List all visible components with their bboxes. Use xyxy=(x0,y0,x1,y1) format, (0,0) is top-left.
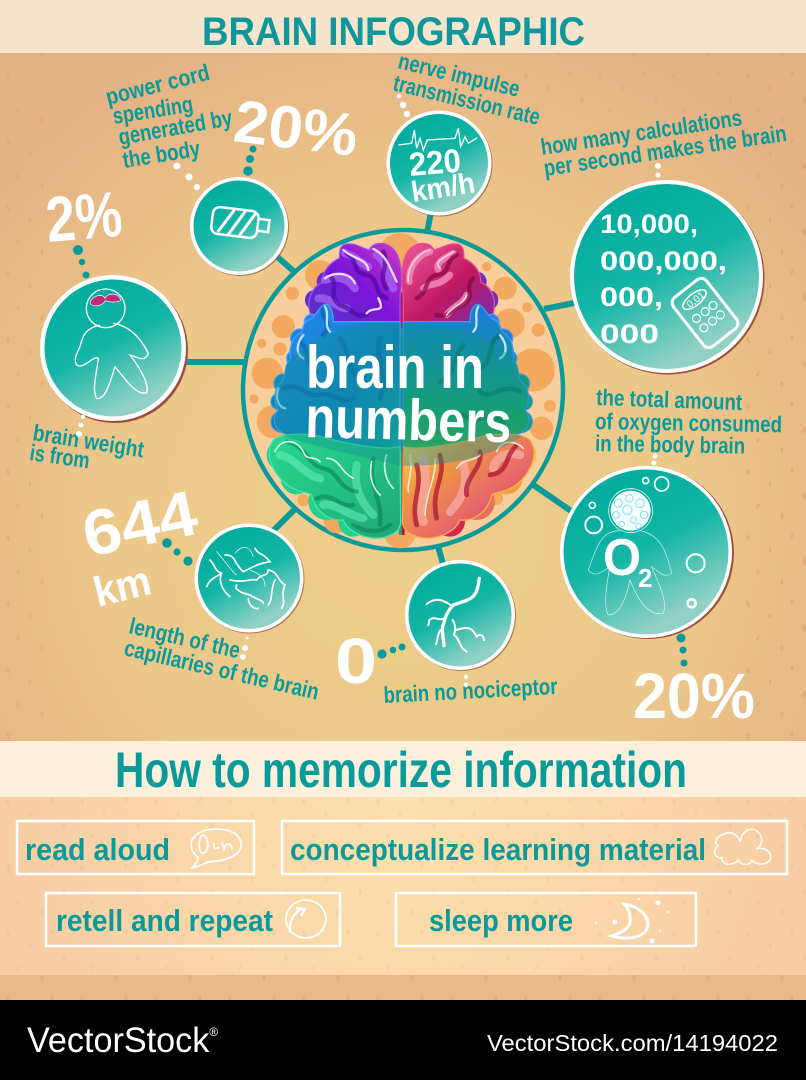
panel: capillaries xyxy=(76,476,322,705)
stat: O2: O xyxy=(603,529,641,587)
stat: 20%: 20% xyxy=(230,87,362,169)
midline backing xyxy=(399,292,405,535)
stat: 220 km/h: km/h xyxy=(409,167,477,209)
label: power cord spending: the body xyxy=(121,135,202,173)
box: read aloud xyxy=(17,821,254,874)
label: capillaries length: capillaries of the brain xyxy=(122,635,322,705)
box: sleep more: sleep more xyxy=(429,903,573,938)
label: nerve impulse transmission rate: nerve impulse xyxy=(396,48,522,102)
heading: brain in numbers: numbers xyxy=(305,385,512,455)
brain illustration xyxy=(267,243,537,538)
panel: power cord xyxy=(103,59,362,276)
icon: capillaries xyxy=(207,547,285,609)
icon: person with brain xyxy=(75,289,148,399)
box: sleep more xyxy=(396,893,696,946)
label: how many calculations: how many calculations xyxy=(539,104,744,160)
stat: 20% oxygen: 20% xyxy=(633,660,755,732)
box: retell and repeat: retell and repeat xyxy=(56,903,273,938)
stat: 644 km: km xyxy=(89,556,155,616)
label: brain weight: is from xyxy=(28,439,91,473)
label: nerve impulse transmission rate xyxy=(391,48,543,130)
label: total oxygen: the total amount xyxy=(596,384,743,415)
dots: 2% xyxy=(73,245,90,278)
panel: nerve impulse xyxy=(386,48,543,216)
icon: moon and stars xyxy=(595,898,669,944)
icon: body with bubbles xyxy=(585,477,705,615)
stat: O2: 2 xyxy=(638,563,652,593)
heading: how to memorize information: How to memorize information xyxy=(115,742,687,798)
heading: brain in numbers xyxy=(305,334,512,455)
dots: label xyxy=(397,94,410,117)
stat: calculations number: 000,000, xyxy=(600,246,727,276)
box: retell and repeat xyxy=(46,893,340,946)
label: capillaries length xyxy=(122,613,322,705)
stat: 644 km: 644 xyxy=(76,476,204,571)
label: total oxygen: in the body brain xyxy=(595,430,745,459)
dots: label xyxy=(76,415,85,437)
icon: speech bubble xyxy=(191,829,241,868)
dots: 0 xyxy=(377,644,406,659)
footer bar xyxy=(0,1000,806,1080)
label: power cord spending: spending xyxy=(111,91,195,129)
label: power cord spending: generated by xyxy=(116,104,234,150)
dots: 20% xyxy=(676,634,688,666)
stat: calculations number: 000 xyxy=(600,319,659,349)
stat: calculations number xyxy=(600,209,727,349)
dots: 20% xyxy=(243,146,256,176)
footer bar: VectorStock xyxy=(27,1021,214,1060)
heading: brain in numbers: brain in xyxy=(306,334,484,401)
dots: label xyxy=(174,162,200,190)
icon: repeat circle xyxy=(286,900,326,938)
label: brain weight: brain weight xyxy=(31,419,146,463)
label: power cord spending: power cord xyxy=(103,59,212,110)
panel: brain weight 2% xyxy=(28,178,188,473)
translucent band xyxy=(270,323,533,466)
label: brain no nociceptor: brain no nociceptor xyxy=(383,673,558,708)
icon: battery xyxy=(210,206,270,240)
left hemisphere xyxy=(267,243,401,538)
panel: calculations per second xyxy=(539,104,788,375)
footer bar: ® xyxy=(209,1025,218,1039)
box: conceptualize learning material xyxy=(282,821,787,874)
panel: oxygen xyxy=(560,384,782,732)
footer bar: VectorStock.com/14194022 xyxy=(487,1030,778,1056)
right hemisphere xyxy=(402,243,537,538)
icon: cloud xyxy=(715,829,771,864)
dots: label xyxy=(652,454,658,466)
box: conceptualize learning material: conceptualize learning material xyxy=(290,832,706,867)
stat: 220 km/h: 220 xyxy=(407,142,462,183)
stat: 220 km/h xyxy=(407,142,477,209)
stat: calculations number: 000, xyxy=(600,282,663,312)
dots: label xyxy=(240,636,248,660)
stat: 0: 0 xyxy=(335,625,377,697)
label: total oxygen xyxy=(595,384,782,459)
orange background dots xyxy=(249,233,556,548)
icon: calculator: 0,01 xyxy=(685,290,707,311)
panel: nociceptor xyxy=(335,560,558,708)
dots: label xyxy=(655,163,661,178)
stat: 644 km xyxy=(76,476,204,616)
icon: calculator xyxy=(669,276,741,350)
connectors xyxy=(184,212,574,564)
dots: label xyxy=(464,675,468,687)
stat: 2%: 2% xyxy=(43,178,125,256)
icon: pulse line xyxy=(398,128,477,150)
icon: nerve branch xyxy=(427,578,484,652)
box: read aloud: read aloud xyxy=(25,832,170,867)
stat: calculations number: 10,000, xyxy=(600,209,698,239)
label: nerve impulse transmission rate: transmission rate xyxy=(391,70,543,130)
dots: 644 xyxy=(162,538,193,566)
label: power cord spending xyxy=(103,59,234,173)
centre circle with brain xyxy=(243,230,563,550)
title: BRAIN INFOGRAPHIC xyxy=(202,10,585,54)
label: capillaries length: length of the xyxy=(127,613,243,663)
